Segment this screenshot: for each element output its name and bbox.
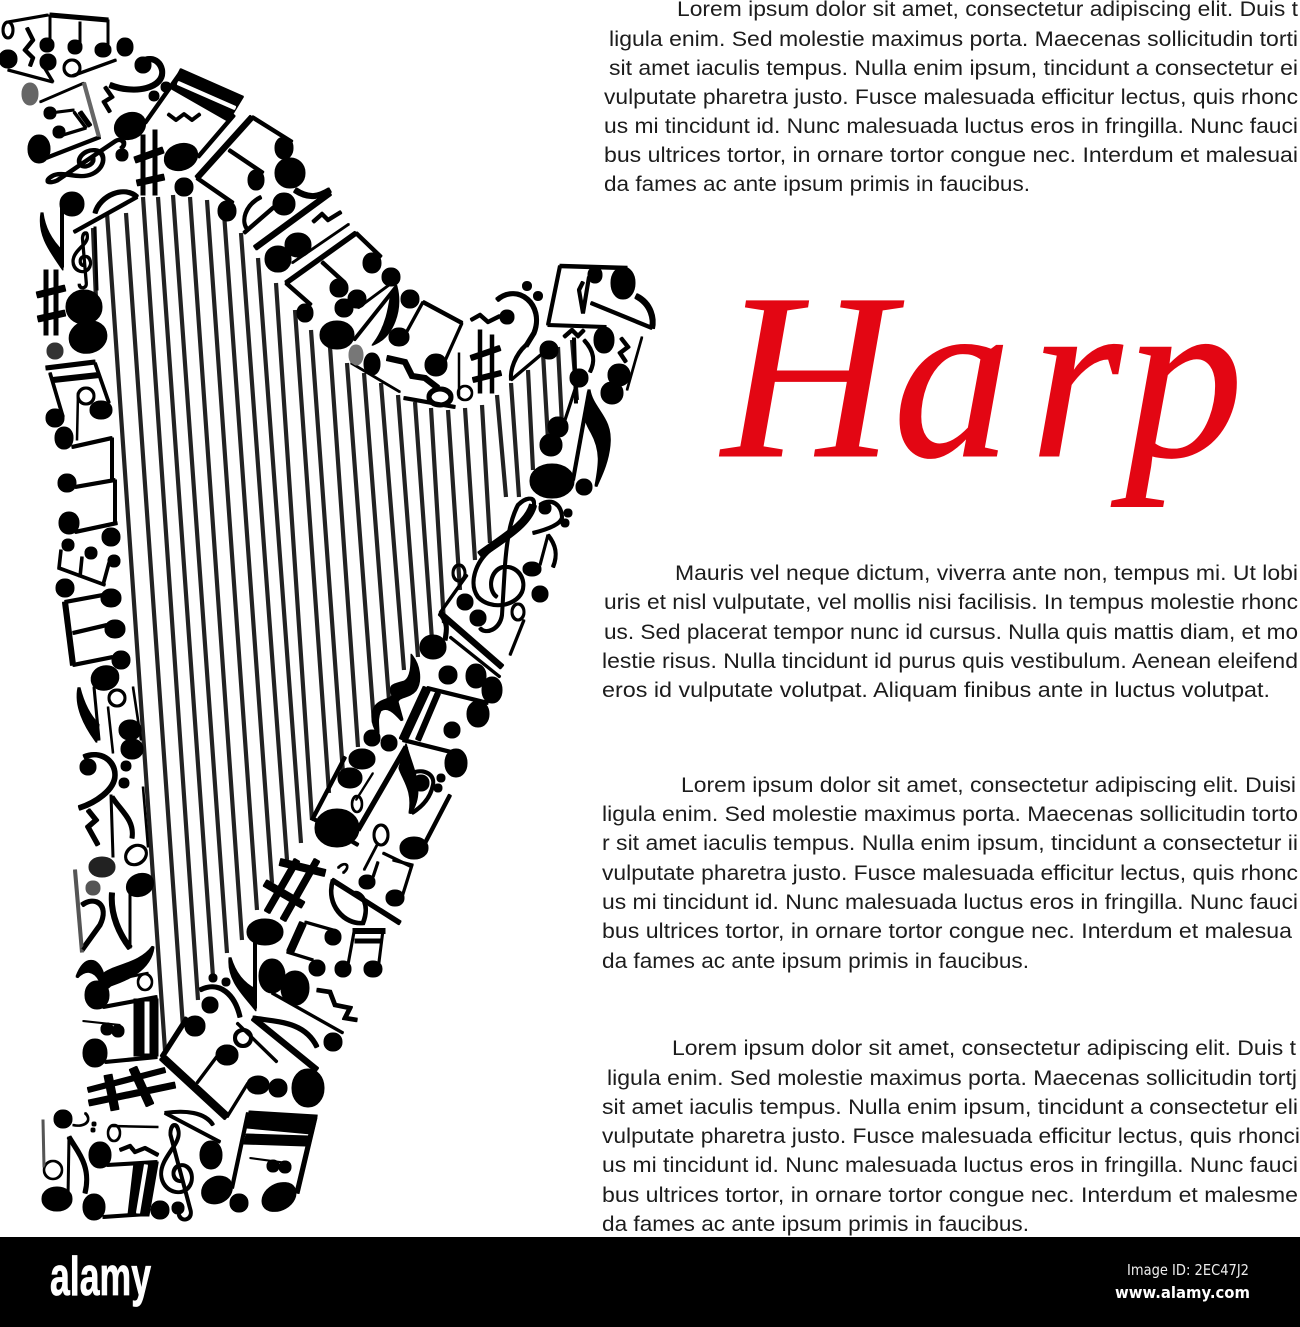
text block: first paragraph: sit amet iaculis tempus. Nulla enim ipsum, tincidunt a consectetur ei xyxy=(609,57,1298,80)
icon: big wavy rest xyxy=(373,657,419,733)
text block: second paragraph: Mauris vel neque dictum, viverra ante non, tempus mi. Ut lobi xyxy=(675,562,1298,585)
text block: third paragraph: da fames ac ante ipsum primis in faucibus. xyxy=(602,950,1029,973)
harp of notes: foot cluster xyxy=(43,1111,316,1222)
icon: sharp sign xyxy=(265,860,325,920)
text block: first paragraph: us mi tincidunt id. Nunc malesuada luctus eros in fringilla. Nunc fauci xyxy=(604,115,1298,138)
text block: first paragraph: da fames ac ante ipsum primis in faucibus. xyxy=(604,173,1030,196)
icon: large treble clef xyxy=(474,499,534,631)
text block: third paragraph: bus ultrices tortor, in ornare tortor congue nec. Interdum et malesua xyxy=(602,920,1292,943)
text block: third paragraph: r sit amet iaculis tempus. Nulla enim ipsum, tincidunt a consectetur ii xyxy=(602,832,1298,855)
text block: fourth paragraph: sit amet iaculis tempus. Nulla enim ipsum, tincidunt a consectetur eli xyxy=(602,1096,1298,1119)
icon: sharp sign xyxy=(135,130,164,195)
text block: first paragraph xyxy=(604,0,1298,196)
icon: bass clef xyxy=(412,771,444,813)
bottom watermark bar xyxy=(0,1237,1300,1327)
text block: fourth paragraph: da fames ac ante ipsum primis in faucibus. xyxy=(602,1213,1029,1236)
icon: small treble clef xyxy=(73,233,91,288)
icon: bass clef xyxy=(497,282,542,346)
icon: triple beamed notes xyxy=(65,590,129,668)
icon: bracket notes xyxy=(162,1017,323,1117)
text block: third paragraph xyxy=(602,774,1298,973)
text block: second paragraph: eros id vulputate volutpat. Aliquam finibus ante in luctus volutpat. xyxy=(602,679,1270,702)
icon: bass clef xyxy=(200,975,240,1017)
text block: second paragraph: lestie risus. Nulla tincidunt id purus quis vestibulum. Aenean eleifend xyxy=(602,650,1298,673)
title: Harp xyxy=(719,246,1244,508)
icon: treble clef xyxy=(153,1124,199,1222)
text block: third paragraph: Lorem ipsum dolor sit amet, consectetur adipiscing elit. Duisi xyxy=(681,774,1296,797)
text block: first paragraph: ligula enim. Sed molestie maximus porta. Maecenas sollicitudin torti xyxy=(609,28,1298,51)
icon: beamed notes xyxy=(111,70,242,174)
icon: flagged note xyxy=(43,1137,87,1210)
text block: second paragraph: us. Sed placerat tempor nunc id cursus. Nulla quis mattis diam, et mo xyxy=(604,621,1298,644)
harp of notes: top-left head cluster xyxy=(0,15,242,195)
logo: alamy: alamy xyxy=(50,1245,151,1307)
text block: fourth paragraph: bus ultrices tortor, in ornare tortor congue nec. Interdum et malesme xyxy=(602,1184,1298,1207)
icon: large sharp sign xyxy=(88,1068,175,1110)
harp of notes: left upper column xyxy=(37,192,150,877)
icon: bracket note pair xyxy=(197,117,292,220)
harp of notes: right tip cluster xyxy=(471,266,653,497)
text block: fourth paragraph: vulputate pharetra justo. Fusce malesuada efficitur lectus, quis rhonci xyxy=(602,1125,1300,1148)
text block: third paragraph: us mi tincidunt id. Nunc malesuada luctus eros in fringilla. Nunc fauci xyxy=(602,891,1298,914)
text block: first paragraph: bus ultrices tortor, in ornare tortor congue nec. Interdum et malesuai xyxy=(604,144,1298,167)
website url: www.alamy.com xyxy=(1115,1283,1250,1302)
icon: wavy rest xyxy=(77,947,153,988)
icon: bass clef xyxy=(79,755,130,808)
icon: large flagged note xyxy=(531,390,609,497)
harp of notes: upper neck cluster xyxy=(197,117,501,407)
text block: fourth paragraph: us mi tincidunt id. Nunc malesuada luctus eros in fringilla. Nunc fauci xyxy=(602,1154,1298,1177)
icon: beam block xyxy=(135,1000,157,1055)
icon: lying treble clef xyxy=(45,133,130,195)
icon: sharp sign xyxy=(471,330,501,393)
text block: second paragraph: uris et nisl vulputate, vel mollis nisi facilisis. In tempus molestie rhonc xyxy=(604,591,1298,614)
icon: boxed note xyxy=(548,266,653,328)
harp of notes: lower pillar and base cluster xyxy=(75,860,412,1117)
icon: sharp sign xyxy=(37,270,65,335)
text block: first paragraph: vulputate pharetra justo. Fusce malesuada efficitur lectus, quis rhonc xyxy=(604,86,1298,109)
icon: beamed notes xyxy=(46,362,112,480)
harp strings xyxy=(93,195,577,1050)
text block: third paragraph: vulputate pharetra justo. Fusce malesuada efficitur lectus, quis rhonc xyxy=(602,862,1298,885)
icon: small bass clef xyxy=(533,502,571,533)
icon: wide beam block xyxy=(403,688,488,755)
text block: fourth paragraph: ligula enim. Sed molestie maximus porta. Maecenas sollicitudin tortj xyxy=(607,1067,1297,1090)
text block: third paragraph: ligula enim. Sed molestie maximus porta. Maecenas sollicitudin torto xyxy=(602,803,1298,826)
icon: flagged note xyxy=(321,287,398,348)
text block: fourth paragraph xyxy=(602,1037,1300,1236)
image id: Image ID: 2EC47J2 xyxy=(1127,1261,1249,1279)
text block: second paragraph xyxy=(602,562,1298,702)
harp of notes: lower right pillar cluster xyxy=(312,499,571,870)
icon: bracket note trio xyxy=(286,233,399,321)
text block: fourth paragraph: Lorem ipsum dolor sit amet, consectetur adipiscing elit. Duis t xyxy=(672,1037,1296,1060)
icon: flagged note xyxy=(41,193,83,267)
icon: bass clef xyxy=(110,58,170,100)
icon: large beamed notes xyxy=(198,1112,316,1216)
